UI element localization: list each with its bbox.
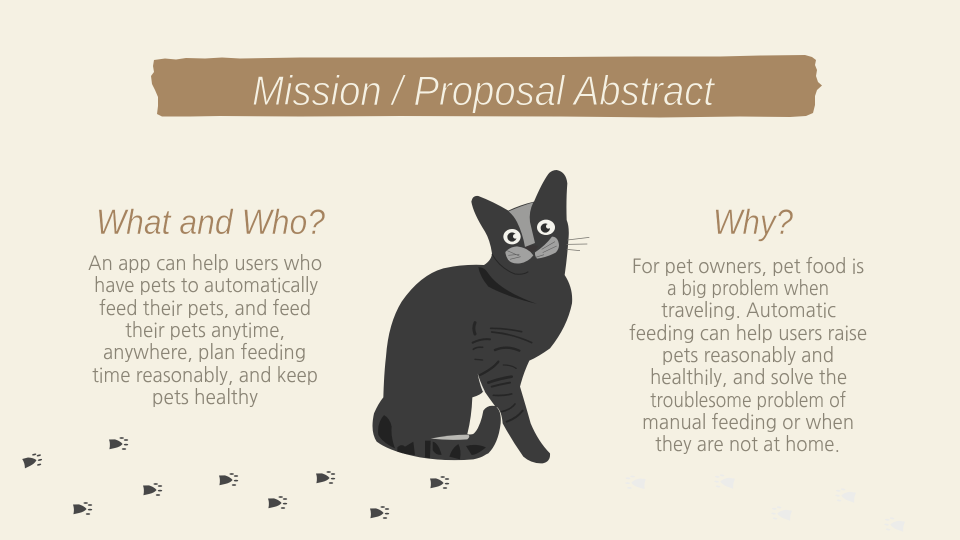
faint paw print <box>835 488 856 504</box>
whisker marks <box>507 242 557 259</box>
text block: what and who: time reasonably, and keep <box>92 365 318 385</box>
muzzle right lobe <box>535 237 559 259</box>
text block: what and who: feed their pets, and feed <box>99 298 311 318</box>
faint paw print <box>714 474 735 490</box>
paw print <box>143 483 162 496</box>
right eye <box>537 220 555 235</box>
paw print <box>268 496 287 509</box>
paw print <box>370 506 389 519</box>
cat silhouette <box>372 170 572 463</box>
text block: why: For pet owners, pet food is <box>632 256 864 276</box>
faint paw print <box>625 475 646 490</box>
text block: why: pets reasonably and <box>662 345 834 365</box>
text block: what and who: have pets to automatically <box>94 275 318 295</box>
text block: what and who: anywhere, plan feeding <box>103 342 306 362</box>
text block: what and who: pets healthy <box>152 387 258 407</box>
text block: why: healthily, and solve the <box>650 367 847 387</box>
paw print <box>430 476 449 489</box>
heading: Why?: Why? <box>713 203 793 242</box>
gap between tail and leg <box>467 391 495 435</box>
paw prints: faint trail <box>625 474 905 533</box>
text block: why: they are not at home. <box>655 434 840 454</box>
left eye <box>503 229 521 244</box>
paw print <box>109 437 128 450</box>
whiskers <box>567 237 589 251</box>
heading: What and Who?: What and Who? <box>96 203 325 242</box>
collar lines <box>492 254 528 274</box>
text block: why <box>629 256 867 454</box>
title: Mission / Proposal Abstract <box>252 67 716 114</box>
forehead stripe <box>509 202 535 247</box>
belly patch <box>431 435 469 440</box>
tail <box>425 406 501 460</box>
illustration: black cat <box>372 170 589 463</box>
hip and tail markings <box>378 415 486 459</box>
text block: why: troublesome problem of <box>650 390 846 410</box>
text block: what and who <box>88 253 322 407</box>
paw print <box>219 473 238 486</box>
title banner <box>151 55 822 118</box>
faint paw print <box>771 506 792 522</box>
text block: what and who: An app can help users who <box>88 253 322 273</box>
leg stripes <box>473 323 532 422</box>
text block: why: a big problem when <box>667 278 829 298</box>
paw print <box>316 471 335 484</box>
paw prints: dark trail <box>22 437 449 519</box>
brush stroke banner shape <box>151 55 822 118</box>
faint paw print <box>884 517 905 533</box>
text block: what and who: their pets anytime, <box>125 320 285 340</box>
text block: why: feeding can help users raise <box>629 323 867 343</box>
paw print <box>73 502 92 515</box>
text block: why: traveling. Automatic <box>661 300 836 320</box>
paw print <box>22 452 43 469</box>
nose <box>525 245 538 252</box>
muzzle left lobe <box>505 246 533 264</box>
text block: why: manual feeding or when <box>642 412 854 432</box>
white chest sliver <box>478 373 485 392</box>
